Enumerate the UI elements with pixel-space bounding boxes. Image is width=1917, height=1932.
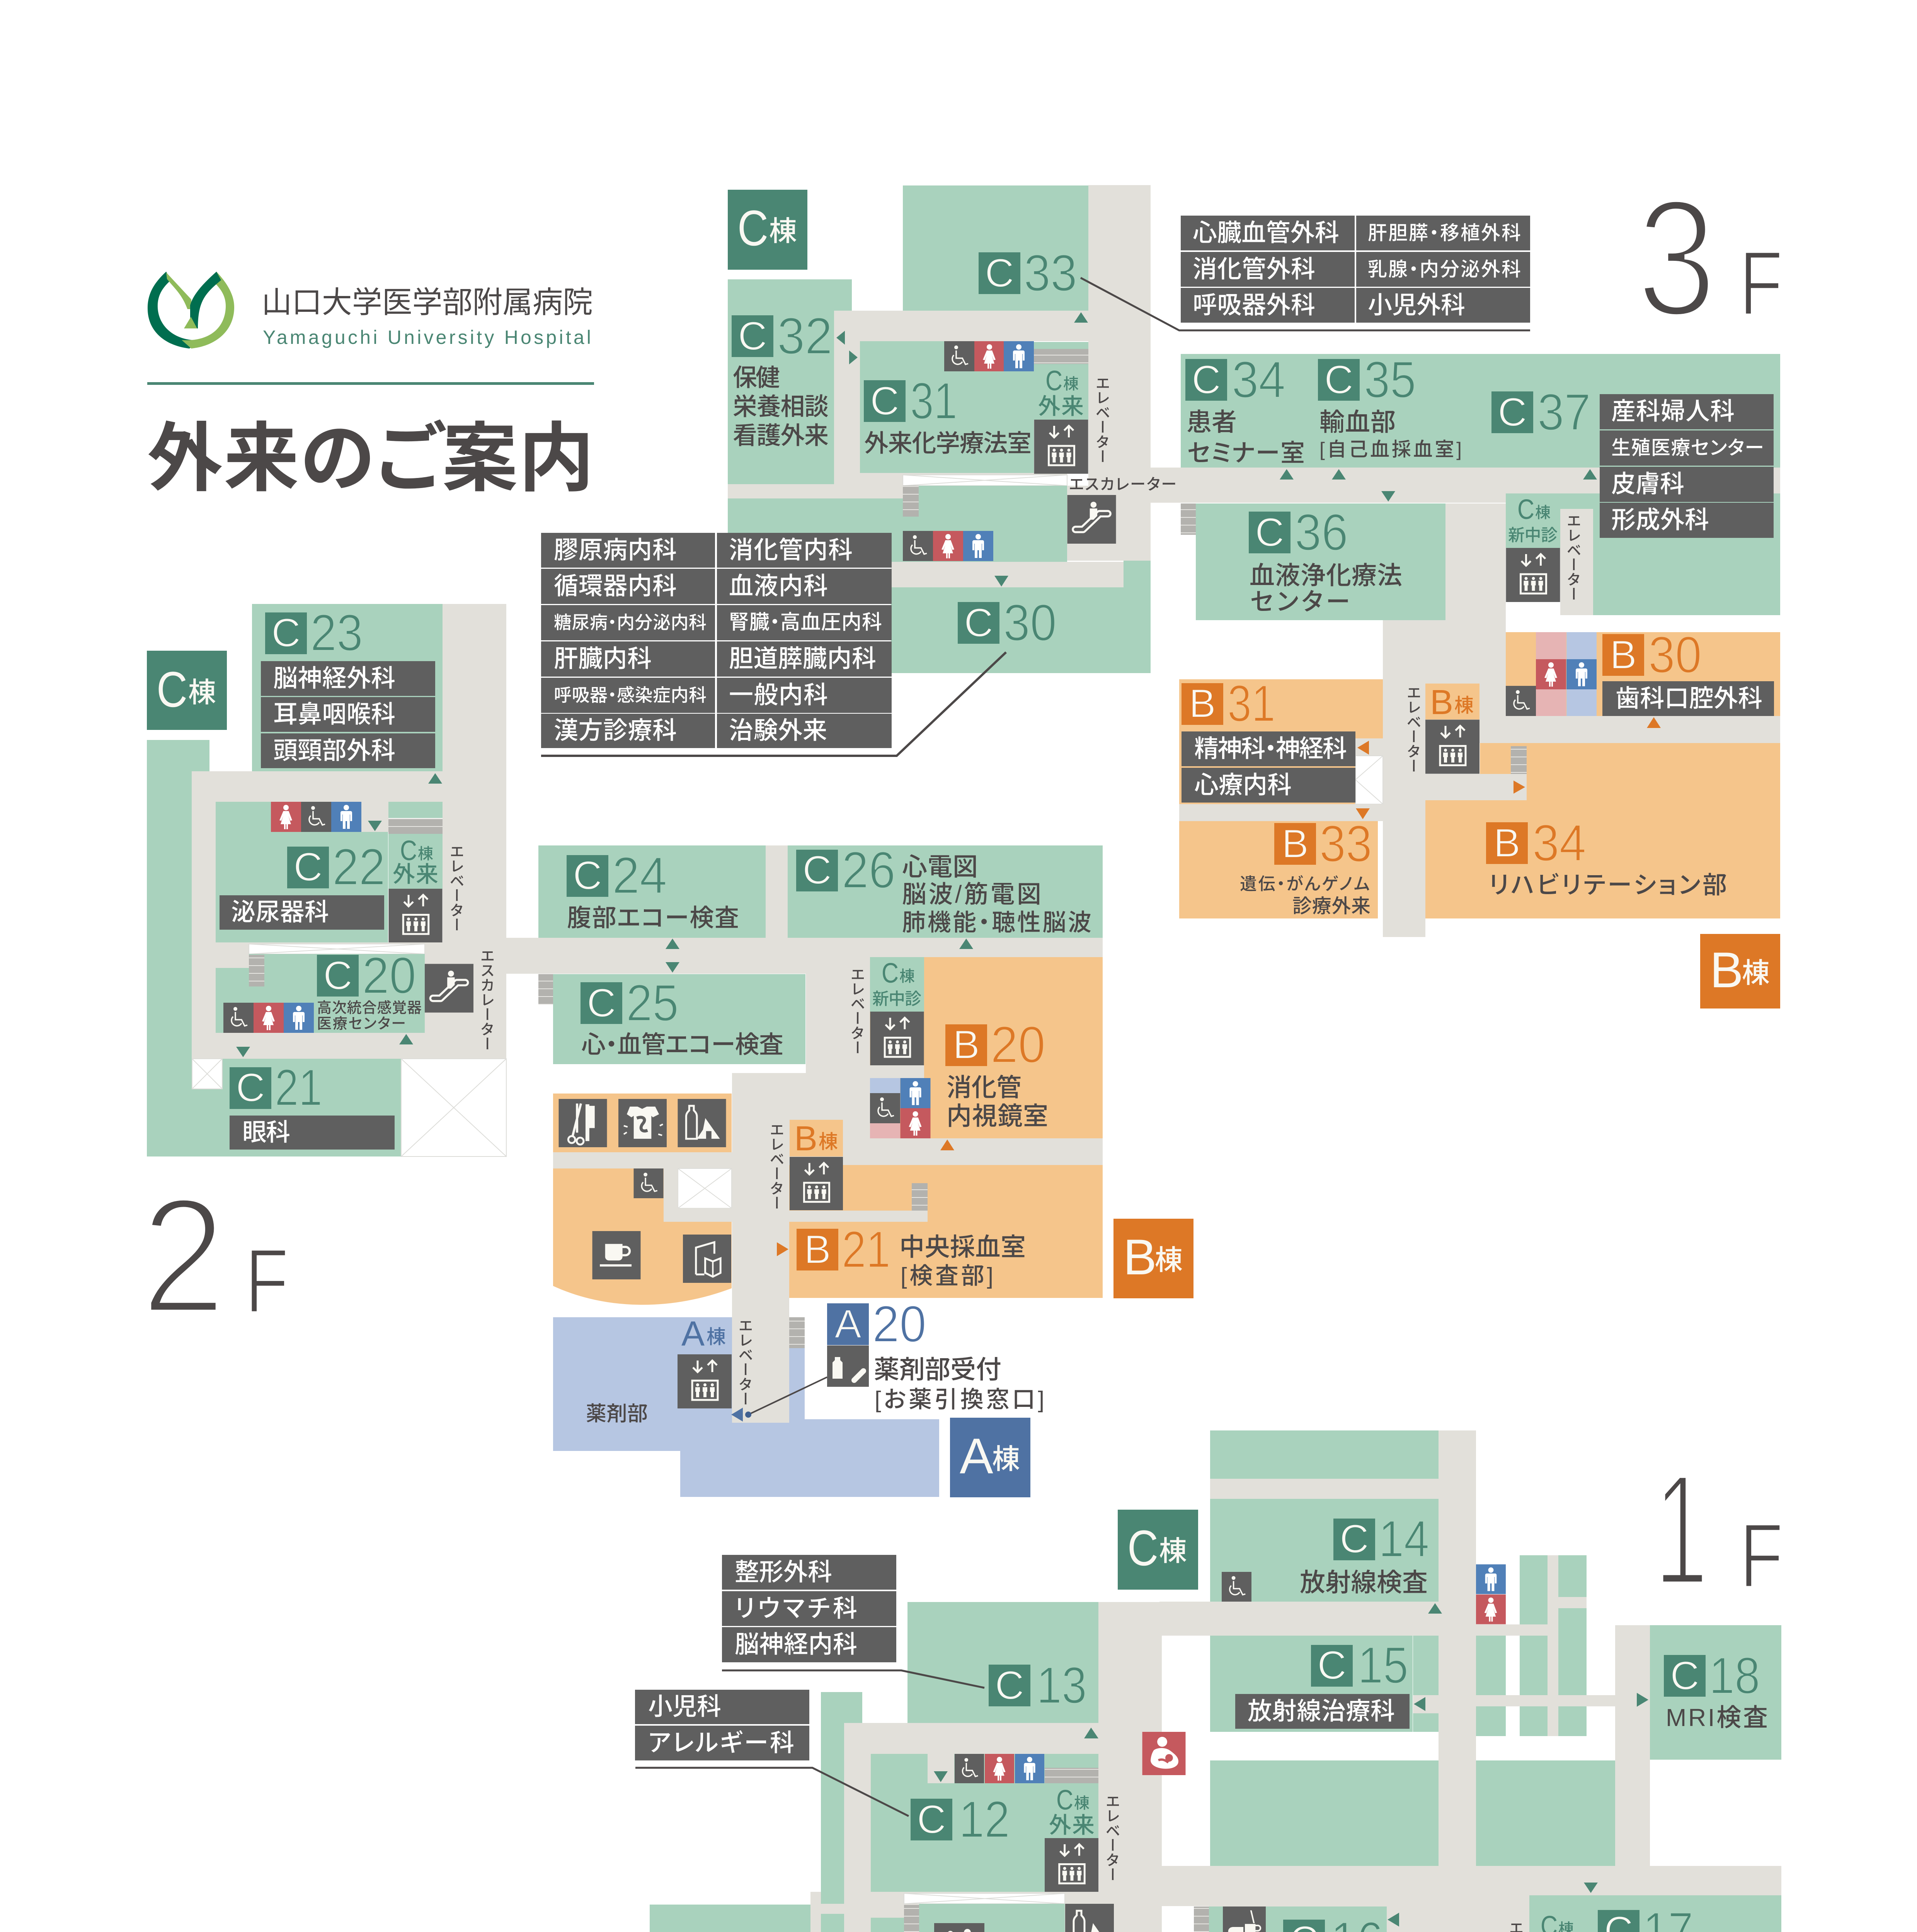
room: C24: 24: [612, 847, 667, 904]
department list: C37: 生殖医療センター: [1611, 437, 1764, 459]
department table: C30: [541, 533, 892, 748]
department list: C13: 脳神経内科: [735, 1631, 857, 1658]
room: B21: B: [804, 1227, 831, 1272]
floor shapes: [147, 604, 506, 1156]
department table: C30: 循環器内科: [554, 573, 677, 600]
room: B21: 21: [842, 1221, 890, 1278]
arrows: 3F left: [836, 312, 1088, 587]
room: C31: 31: [910, 372, 957, 430]
icon: admission set counter: [1223, 1906, 1266, 1932]
room: B30: 歯科口腔外科: [1616, 685, 1762, 712]
logo mark: [148, 272, 234, 349]
label: elevator: エレベーター: [1103, 1794, 1119, 1882]
floor shapes: [1151, 354, 1780, 937]
floor number 2F: 2: [141, 1164, 226, 1348]
label: elevator: エレベーター: [1093, 376, 1109, 464]
elevator: B wing: B: [1430, 683, 1453, 722]
room: C31: [864, 372, 1032, 457]
room: C21: 眼科: [242, 1119, 290, 1146]
department table: C33: 小児外科: [1368, 292, 1465, 319]
room: C23: C: [271, 611, 301, 655]
room: C30: C: [964, 600, 993, 645]
elevator: C wing outpatient: C: [1045, 366, 1062, 396]
arrows: 3F right: [1280, 469, 1661, 819]
room: C34: セミナー室: [1187, 440, 1305, 467]
icon: wheelchair: [1222, 1572, 1251, 1602]
elevator: C wing outpatient: 外来: [1038, 394, 1084, 419]
room: C14: 放射線検査: [1300, 1568, 1428, 1597]
department list: C13: [722, 1555, 896, 1662]
room: B20: 消化管: [947, 1073, 1021, 1101]
icon: library: [683, 1235, 731, 1283]
room: B21: [検査部]: [901, 1263, 993, 1289]
floor shapes: [728, 185, 1151, 673]
room: C25: 心・血管エコー検査: [581, 1031, 783, 1058]
elevator: C wing new central: 棟: [1535, 504, 1551, 521]
room: C25: C: [587, 981, 616, 1026]
floor number 3F: [1637, 165, 1783, 351]
room: C37: [1491, 383, 1591, 441]
room: C36: C: [1255, 510, 1284, 555]
room: C18: [1664, 1647, 1768, 1731]
room: C33: 33: [1024, 244, 1077, 302]
restroom icons lower: [903, 531, 993, 561]
elevator: A wing: [678, 1315, 732, 1408]
room: C15: [1235, 1637, 1410, 1729]
leader line: C33: [1081, 278, 1530, 330]
room: C22: 22: [332, 838, 385, 896]
label: elevator: エレベーター: [767, 1122, 783, 1210]
elevator: A wing: 棟: [707, 1326, 726, 1348]
label: elevator: エレベーター: [1404, 685, 1420, 773]
room: A20: A: [834, 1302, 861, 1347]
department table: C30: 糖尿病・内分泌内科: [554, 612, 707, 633]
room: C14: 14: [1379, 1510, 1429, 1568]
icon: cafe: [592, 1231, 641, 1279]
room: C30: [958, 594, 1057, 651]
room: C37: 37: [1537, 383, 1591, 441]
room: C24: C: [573, 853, 602, 898]
department table: C30: 膠原病内科: [554, 537, 677, 564]
room: B30: 30: [1648, 626, 1702, 684]
elevator: C wing outpatient: [1034, 366, 1088, 474]
room: C13: 13: [1037, 1657, 1087, 1714]
room: C35: 35: [1364, 351, 1416, 409]
elevator: C wing outpatient: 棟: [1074, 1795, 1090, 1812]
badge: C wing 2F: 棟: [188, 677, 216, 708]
elevator: C wing outpatient: 棟: [418, 845, 433, 862]
restrooms B20: [870, 1078, 931, 1138]
icon: nursing room: [1142, 1732, 1186, 1775]
room: C35: [1318, 351, 1462, 460]
badge: A wing 2F: [950, 1418, 1030, 1497]
main reception: [934, 1923, 1056, 1932]
badge: A wing 2F: A: [960, 1428, 993, 1484]
panel: 3F left wing: [541, 185, 1151, 756]
department list: C37: [1600, 394, 1774, 538]
label: pharmacy: 薬剤部: [586, 1403, 648, 1425]
department table: C30: 呼吸器・感染症内科: [554, 685, 707, 705]
department list: C12: [635, 1690, 809, 1760]
room: C13: [989, 1657, 1087, 1714]
room: B31: 精神科・神経科: [1194, 735, 1347, 762]
room: B30: B: [1610, 633, 1637, 677]
room: C23: 脳神経外科: [273, 665, 395, 692]
restrooms C12: [955, 1754, 1044, 1783]
room: C32: 栄養相談: [733, 393, 829, 420]
floor shapes: [1057, 1430, 1781, 1932]
elevator: C wing new central: C: [1517, 494, 1534, 525]
room: C24: 腹部エコー検査: [567, 905, 739, 932]
restrooms C20: [223, 1003, 314, 1033]
room: C12: C: [917, 1797, 946, 1842]
hospital name: 山口大学医学部附属病院: [262, 285, 593, 319]
department list: C12: アレルギー科: [648, 1730, 794, 1757]
department list: C13: 整形外科: [735, 1559, 832, 1586]
elevator: C wing new central: [1506, 494, 1560, 602]
room: C33: C: [985, 251, 1014, 296]
label: escalator: エスカレーター: [1069, 476, 1176, 493]
room: C15: 放射線治療科: [1248, 1698, 1395, 1725]
room: C26: 心電図: [902, 852, 978, 881]
department list: C37: 皮膚科: [1611, 471, 1684, 498]
room: C31: C: [870, 379, 899, 423]
room: C21: 21: [275, 1059, 322, 1117]
department table: C30: 治験外来: [729, 717, 827, 744]
badge: C wing 3F: 棟: [769, 216, 797, 247]
room: C34: C: [1192, 357, 1221, 402]
elevator: B wing: 棟: [1454, 695, 1474, 716]
pointer: pharmacy counter: [731, 1377, 827, 1422]
badge: C wing 2F: [147, 651, 227, 730]
room: C12: [911, 1791, 1010, 1849]
room: C35: [自己血採血室]: [1319, 439, 1462, 460]
room: C18: MRI検査: [1666, 1704, 1768, 1731]
header: [147, 272, 594, 501]
badge: C wing 3F: C: [737, 200, 768, 256]
badge: C wing 2F: C: [157, 661, 187, 718]
room: B21: 中央採血室: [899, 1233, 1026, 1261]
badge: C wing 3F: [728, 190, 807, 270]
room: B31: B: [1189, 681, 1216, 726]
room: B20: B: [953, 1022, 980, 1067]
room: C36: [1249, 504, 1402, 616]
room: C18: 18: [1709, 1647, 1760, 1705]
elevator: B wing: B: [794, 1119, 817, 1158]
elevator: C wing new central: [1529, 1911, 1583, 1932]
room: C20: [317, 947, 422, 1032]
panel: 2F centre: [506, 842, 1193, 1497]
room: A20: [お薬引換窓口]: [875, 1386, 1044, 1413]
room: C32: C: [738, 314, 767, 359]
badge: C wing 1F: C: [1127, 1520, 1158, 1576]
department table: C33: 心臓血管外科: [1193, 219, 1339, 247]
room: C23: [261, 604, 435, 768]
icon: escalator: [425, 964, 473, 1012]
room: C34: 34: [1232, 351, 1285, 409]
room: C26: [796, 842, 1091, 935]
department table: C33: 消化管外科: [1193, 256, 1315, 283]
room: B20: 20: [991, 1016, 1045, 1073]
room: A20: 20: [872, 1295, 926, 1353]
room: B21: [797, 1221, 1026, 1289]
label: elevator: エレベーター: [736, 1318, 752, 1406]
room: C13: C: [995, 1663, 1024, 1708]
room: B31: 31: [1227, 675, 1275, 733]
room: C33: [979, 244, 1077, 302]
leader line: C12: [635, 1768, 909, 1816]
restrooms B30: [1506, 659, 1597, 716]
room: C18: C: [1670, 1653, 1699, 1698]
leader line: C30: [541, 652, 1006, 756]
elevator: C wing outpatient: 外来: [1049, 1813, 1095, 1838]
department table: C30: 胆道膵臓内科: [729, 645, 876, 672]
room: B33: B: [1282, 821, 1309, 866]
icon: wheelchair: [634, 1168, 663, 1198]
room: C35: C: [1324, 357, 1353, 402]
department table: C30: 血液内科: [729, 573, 828, 600]
elevator: C wing new central: 棟: [899, 968, 915, 985]
room: C34: [1185, 351, 1305, 467]
room: C32: 32: [777, 308, 833, 365]
room: C37: C: [1498, 390, 1527, 435]
icon: escalator: [1067, 495, 1116, 544]
department table: C30: 腎臓・高血圧内科: [729, 611, 882, 634]
elevator: C wing new central: C: [882, 958, 899, 989]
room: C23: 23: [310, 604, 363, 662]
room: C34: 患者: [1187, 408, 1237, 436]
room: C30: 30: [1003, 594, 1057, 651]
arrows: 2F west: [236, 773, 442, 1057]
elevator: C wing outpatient: 棟: [1063, 376, 1079, 393]
elevator: C wing outpatient: 外来: [393, 862, 438, 887]
room: C22: 泌尿器科: [231, 899, 329, 926]
room: B34: [1486, 815, 1727, 899]
room: C32: [732, 308, 833, 449]
room: B33: [1240, 815, 1372, 917]
room: B31: [1182, 675, 1355, 803]
room: B33: 遺伝・がんゲノム: [1240, 875, 1370, 893]
elevator: C wing outpatient: [1045, 1785, 1098, 1892]
room: C36: 血液浄化療法: [1250, 561, 1402, 590]
room: C26: 脳波/筋電図: [902, 881, 1041, 908]
restrooms C22: [271, 802, 361, 832]
label: elevator: エレベーター: [1564, 513, 1580, 601]
room: C26: 26: [842, 842, 896, 899]
room: B33: 33: [1319, 815, 1372, 872]
badge: B wing 2F: B: [1123, 1229, 1157, 1285]
room: B31: 心療内科: [1194, 772, 1292, 799]
department table: C30: 肝臓内科: [554, 645, 652, 672]
room: C17: [1598, 1902, 1693, 1932]
icons: shops row: [559, 1099, 726, 1147]
room: C32: 看護外来: [733, 422, 829, 449]
department table: C33: 肝胆膵・移植外科: [1368, 222, 1521, 244]
restroom icons upper: [944, 341, 1034, 371]
room: A20: 薬剤部受付: [874, 1355, 1001, 1384]
arrows: 1F east: [1331, 1603, 1648, 1932]
department list: C12: 小児科: [648, 1693, 721, 1720]
room: C36: センター: [1250, 588, 1350, 616]
room: C22: C: [293, 845, 323, 889]
leader line: C13: [722, 1670, 984, 1688]
elevator: B wing: 棟: [819, 1131, 838, 1153]
room: B34: B: [1493, 821, 1520, 866]
room: C14: [1300, 1510, 1429, 1597]
room: C23: 耳鼻咽喉科: [273, 701, 395, 728]
floor number 2F: [141, 1164, 289, 1348]
badge: B wing 3F: B: [1710, 942, 1743, 998]
badge: B wing 3F: [1700, 934, 1780, 1009]
floor shapes: [650, 1602, 1210, 1932]
room: C21: C: [236, 1065, 265, 1110]
room: C14: C: [1340, 1517, 1369, 1561]
panel: 2F C wing west: [141, 604, 506, 1348]
floor number 1F: 1: [1654, 1441, 1708, 1618]
room: C25: [581, 975, 783, 1058]
floor number 1F: F: [1740, 1505, 1783, 1607]
elevator: C wing new central: [870, 958, 924, 1065]
department table: C33: 乳腺・内分泌外科: [1368, 259, 1521, 280]
room: C24: [567, 847, 739, 932]
room: C31: 外来化学療法室: [864, 430, 1032, 457]
room: B30: [1602, 626, 1774, 716]
room: C20: 20: [362, 947, 416, 1005]
department table: C33: [1181, 216, 1530, 323]
icons: convenience and escalator: [1065, 1904, 1114, 1932]
badge: B wing 2F: [1113, 1219, 1193, 1298]
badge: B wing 2F: 棟: [1155, 1245, 1183, 1276]
badge: B wing 3F: 棟: [1742, 958, 1770, 989]
label: elevator: エレベーター: [848, 967, 864, 1055]
floor number 3F: F: [1739, 232, 1783, 335]
panel: 1F west: [635, 1510, 1210, 1932]
room: C20: 高次統合感覚器: [317, 1000, 422, 1016]
elevator: B wing: [1425, 683, 1479, 774]
room: B33: 診療外来: [1292, 895, 1371, 917]
panel: 1F east: [1057, 1430, 1783, 1932]
department list: C37: 形成外科: [1611, 507, 1709, 534]
room: C26: 肺機能・聴性脳波: [902, 909, 1091, 935]
elevator: C wing outpatient: C: [400, 835, 417, 866]
room: C25: 25: [626, 975, 679, 1032]
room: C22: [220, 838, 385, 930]
room: C16: [1283, 1912, 1383, 1932]
department table: C33: 呼吸器外科: [1193, 292, 1315, 319]
arrows: 2F centre: [666, 939, 973, 1256]
floor shapes: [506, 845, 1103, 1497]
room: C15: C: [1317, 1643, 1347, 1688]
elevator: C wing outpatient: C: [1056, 1785, 1073, 1816]
room: B20: 内視鏡室: [947, 1102, 1048, 1130]
floor number 2F: F: [245, 1230, 289, 1332]
title: 外来のご案内: [147, 417, 594, 501]
elevator: A wing: A: [681, 1315, 705, 1353]
label: elevator: エレベーター: [447, 844, 463, 932]
room: C35: 輸血部: [1319, 408, 1396, 436]
room: A20: [827, 1295, 1044, 1413]
room: C26: C: [802, 848, 832, 893]
room: B20: [945, 1016, 1048, 1130]
badge: A wing 2F: 棟: [992, 1444, 1020, 1475]
badge: C wing 1F: [1118, 1510, 1198, 1590]
arrows: 1F west: [886, 1728, 1098, 1932]
badge: C wing 1F: 棟: [1159, 1536, 1187, 1567]
panel: 3F right wing: [1069, 165, 1783, 1009]
floor number 3F: 3: [1637, 165, 1716, 351]
elevator: C wing new central: 新中診: [872, 990, 921, 1009]
room: C32: 保健: [733, 364, 780, 391]
room: C36: 36: [1295, 504, 1348, 561]
room: C15: 15: [1358, 1637, 1408, 1694]
room: C12: 12: [959, 1791, 1010, 1849]
department list: C13: リウマチ科: [735, 1595, 857, 1622]
restrooms 1F east: [1476, 1564, 1506, 1624]
department table: C30: 漢方診療科: [554, 717, 677, 744]
divider: [147, 382, 594, 385]
room: C20: C: [323, 953, 352, 998]
hospital name english: Yamaguchi University Hospital: [263, 327, 591, 348]
room: B34: リハビリテーション部: [1489, 872, 1727, 899]
department list: C37: 産科婦人科: [1611, 398, 1735, 425]
room: C21: [230, 1059, 395, 1150]
room: C20: 医療センター: [317, 1016, 406, 1032]
room: B34: 34: [1532, 815, 1586, 872]
label: escalator: エスカレーター: [478, 948, 494, 1051]
elevator: C wing new central: 新中診: [1508, 526, 1558, 545]
department table: C30: 消化管内科: [729, 537, 853, 564]
room: C23: 頭頸部外科: [273, 737, 395, 764]
department table: C30: 一般内科: [729, 682, 828, 709]
elevator: B wing: [790, 1119, 843, 1210]
elevator: C wing outpatient: [389, 835, 442, 942]
floor number 1F: [1654, 1441, 1783, 1618]
